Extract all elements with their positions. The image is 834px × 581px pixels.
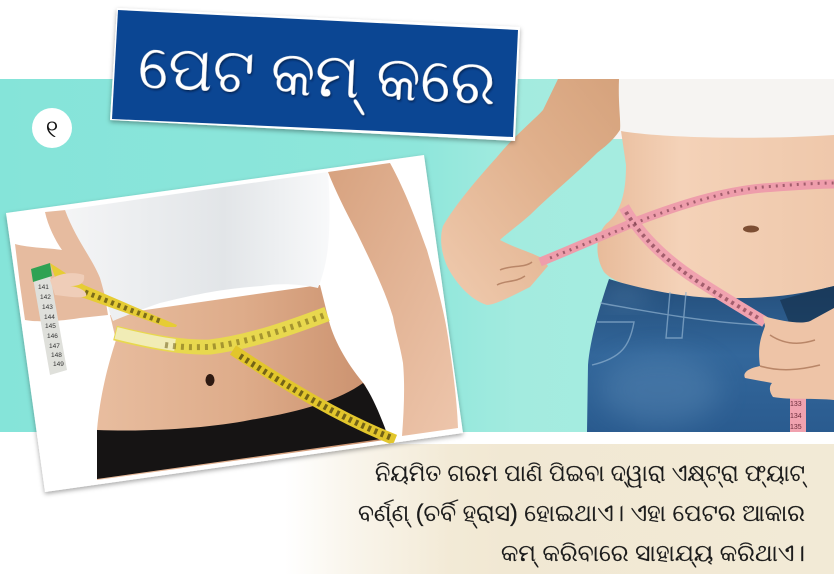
panel: right photo of waist being measured [441,79,834,432]
title text: ପେଟ କମ୍ କରେ [136,33,497,121]
torso [597,131,834,300]
pink tape measure [540,183,834,432]
description text [358,460,807,568]
jeans [587,279,834,432]
white shirt [65,172,330,321]
description text: କମ୍ କରିବାରେ ସାହାଯ୍ୟ କରିଥାଏ। [501,540,805,568]
panel: right photo of waist being measured: 134 [790,413,802,420]
hanging tape end: 145 [45,323,56,330]
hanging tape end: 142 [40,294,51,301]
card white frame [6,155,463,492]
lower strip [233,350,395,440]
left arm [15,210,108,321]
lower hand [744,308,834,400]
tapered upper strip [50,263,177,327]
teal background band [0,79,834,432]
description text: ବର୍ଣ୍ଣ୍ (ଚର୍ବି ହ୍ରାସ) ହୋଇଥାଏ। ଏହା ପେଟର ଆକାର [358,499,805,529]
hanging tape end: 149 [53,361,64,368]
description text: ନିୟମିତ ଗରମ ପାଣି ପିଇବା ଦ୍ୱାରା ଏକ୍ଷ୍ଟ୍ରା ଫ୍ୟାଟ୍ [375,460,807,488]
hanging tape end: 141 [38,284,49,291]
panel: right photo of waist being measured: 135 [790,424,802,431]
white top [612,79,834,139]
number badge: ୧ [46,116,58,143]
hanging tape end [31,263,67,375]
hanging tape end: 148 [51,352,62,359]
title banner [110,8,520,141]
arm and hand [441,79,620,305]
hanging tape end: 147 [49,343,60,350]
hanging tape end: 144 [44,314,55,321]
panel: left photo card [6,155,463,492]
torso [97,285,385,480]
waist strip [115,314,327,347]
black shorts [97,383,388,479]
tape numbers: 133 [790,401,802,408]
jeans pocket and belt loop [592,292,760,365]
navel [743,226,759,232]
fingers [50,273,86,297]
panel: description text background [285,444,834,574]
navel [206,374,214,386]
hanging tape end: 143 [42,304,53,311]
denim fades [600,285,834,425]
hanging tape end: 146 [47,333,58,340]
yellow tape measure [50,263,395,440]
number badge [32,108,72,148]
right arm [328,163,458,436]
